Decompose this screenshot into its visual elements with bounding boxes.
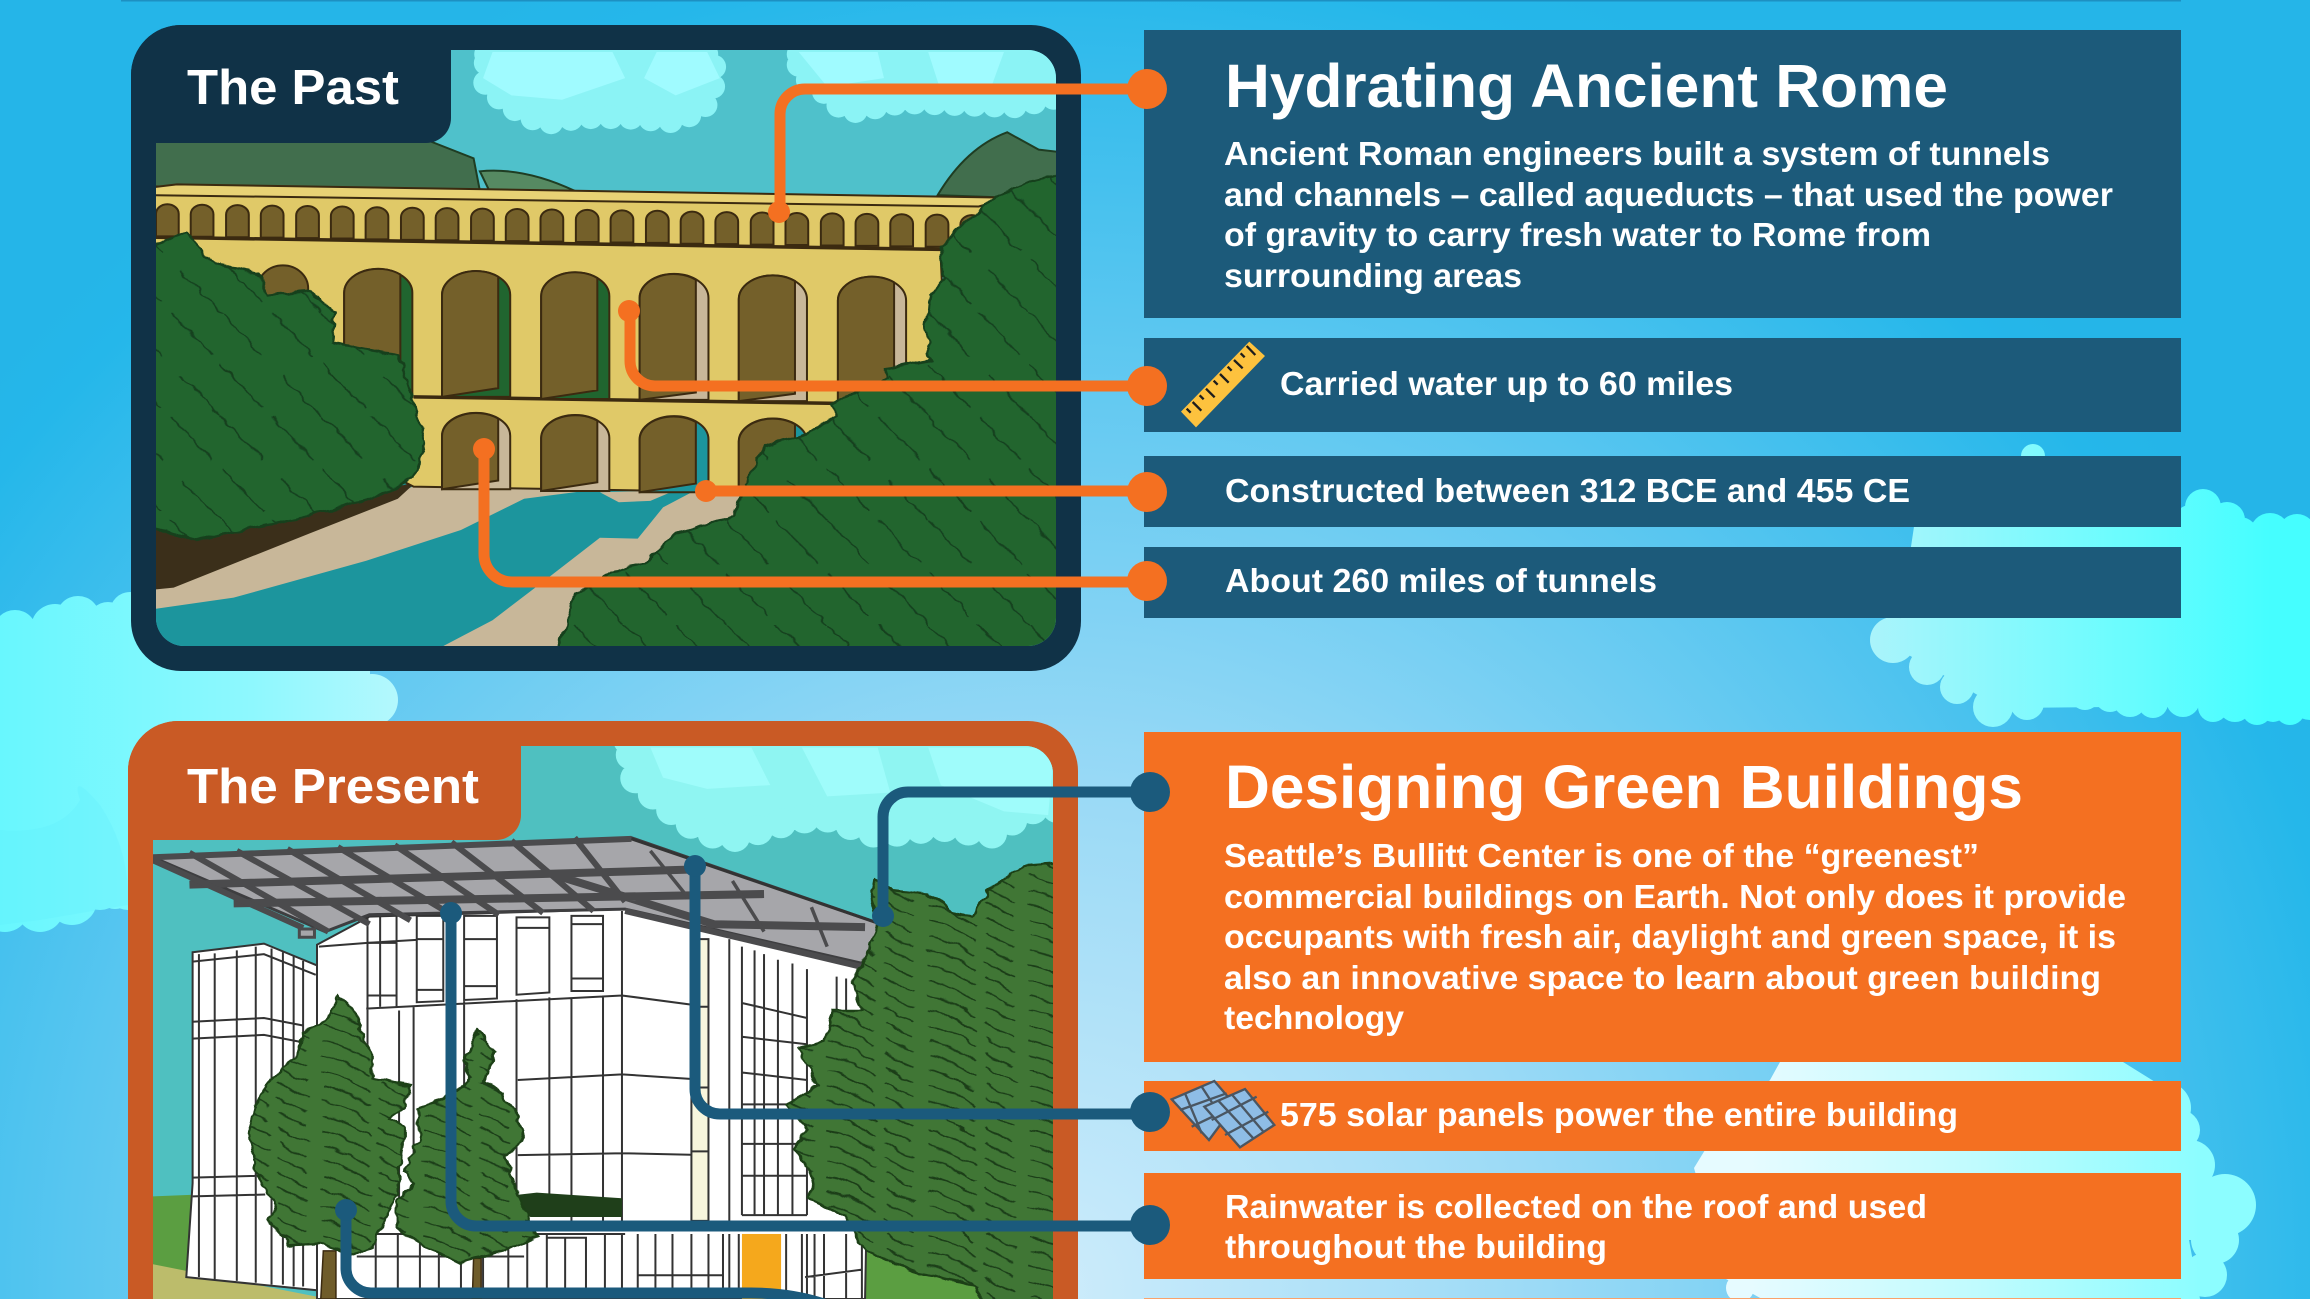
connector: 60 miles xyxy=(618,300,1167,406)
connector: rainwater xyxy=(440,902,1170,1245)
connector: construction dates xyxy=(695,472,1167,512)
heading: Designing Green Buildings xyxy=(1225,753,2023,821)
connector: lower edge xyxy=(335,1199,840,1299)
tab: The Present xyxy=(128,721,521,840)
heading: The Present: The Present xyxy=(187,760,479,814)
tree: left xyxy=(249,995,410,1255)
trunks xyxy=(321,1251,481,1299)
fact bar: rainwater: Rainwater is collected on the roof and used xyxy=(1225,1188,1927,1225)
fact bar: construction dates: Constructed between 312 BCE and 455 CE xyxy=(1225,472,1910,509)
aqueduct illustration xyxy=(145,43,1067,655)
connector: tunnels xyxy=(473,438,1167,601)
tree: middle xyxy=(398,1029,537,1262)
panel: Hydrating Ancient Rome xyxy=(1144,30,2181,318)
fact bar: rainwater: throughout the building xyxy=(1225,1228,1607,1265)
left trees xyxy=(145,232,424,540)
body text: Ancient Roman engineers built a system of tunnels xyxy=(1224,135,2050,172)
fact bar: solar panels xyxy=(1144,1081,2181,1151)
body text xyxy=(1224,837,2126,1036)
fact bar: next panel edge xyxy=(1144,1298,2181,1299)
cloud: lower right xyxy=(1694,1061,2256,1299)
right trees xyxy=(556,173,1067,655)
tree: right xyxy=(786,862,1073,1299)
panel: the present frame xyxy=(128,721,1078,1299)
bullitt center illustration xyxy=(152,740,1073,1299)
fact bar: solar panels: 575 solar panels power the entire building xyxy=(1280,1096,1958,1133)
fact bar: tunnels xyxy=(1144,547,2181,618)
panel: the past frame xyxy=(131,25,1081,671)
fact bar: 60 miles: Carried water up to 60 miles xyxy=(1280,365,1733,402)
body text: occupants with fresh air, daylight and green space, it is xyxy=(1224,918,2116,955)
connector: Designing Green Buildings xyxy=(872,772,1170,927)
river and banks xyxy=(156,483,740,646)
main building xyxy=(317,909,871,1299)
cloud: right xyxy=(1870,444,2310,727)
body text: and channels – called aqueducts – that used the power xyxy=(1224,176,2113,213)
panel: Designing Green Buildings xyxy=(1144,732,2181,1062)
body text: of gravity to carry fresh water to Rome from xyxy=(1224,216,1931,253)
icon: solar panels xyxy=(1172,1081,1274,1147)
aqueduct body xyxy=(152,184,1010,492)
fact bar: rainwater xyxy=(1144,1173,2181,1279)
top edge strip xyxy=(121,0,2181,2)
body text: surrounding areas xyxy=(1224,257,1522,294)
body text: technology xyxy=(1224,999,1405,1036)
heading: The Past: The Past xyxy=(187,61,399,115)
body text xyxy=(1224,135,2113,294)
fact bar: 60 miles xyxy=(1144,338,2181,432)
connector: aqueduct top to Hydrating Ancient Rome xyxy=(768,69,1167,223)
back tower xyxy=(186,944,317,1290)
solar roof xyxy=(153,838,881,969)
connector: solar panels xyxy=(684,855,1170,1132)
heading: Hydrating Ancient Rome xyxy=(1225,52,1948,120)
cloud: left xyxy=(0,592,398,932)
tab: The Past xyxy=(131,25,451,143)
fact bar: construction dates xyxy=(1144,456,2181,527)
icon: ruler xyxy=(1181,342,1265,427)
fact bar: tunnels: About 260 miles of tunnels xyxy=(1225,562,1657,599)
body text: also an innovative space to learn about green building xyxy=(1224,959,2101,996)
body text: commercial buildings on Earth. Not only does it provide xyxy=(1224,878,2126,915)
body text: Seattle’s Bullitt Center is one of the “greenest” xyxy=(1224,837,1979,874)
